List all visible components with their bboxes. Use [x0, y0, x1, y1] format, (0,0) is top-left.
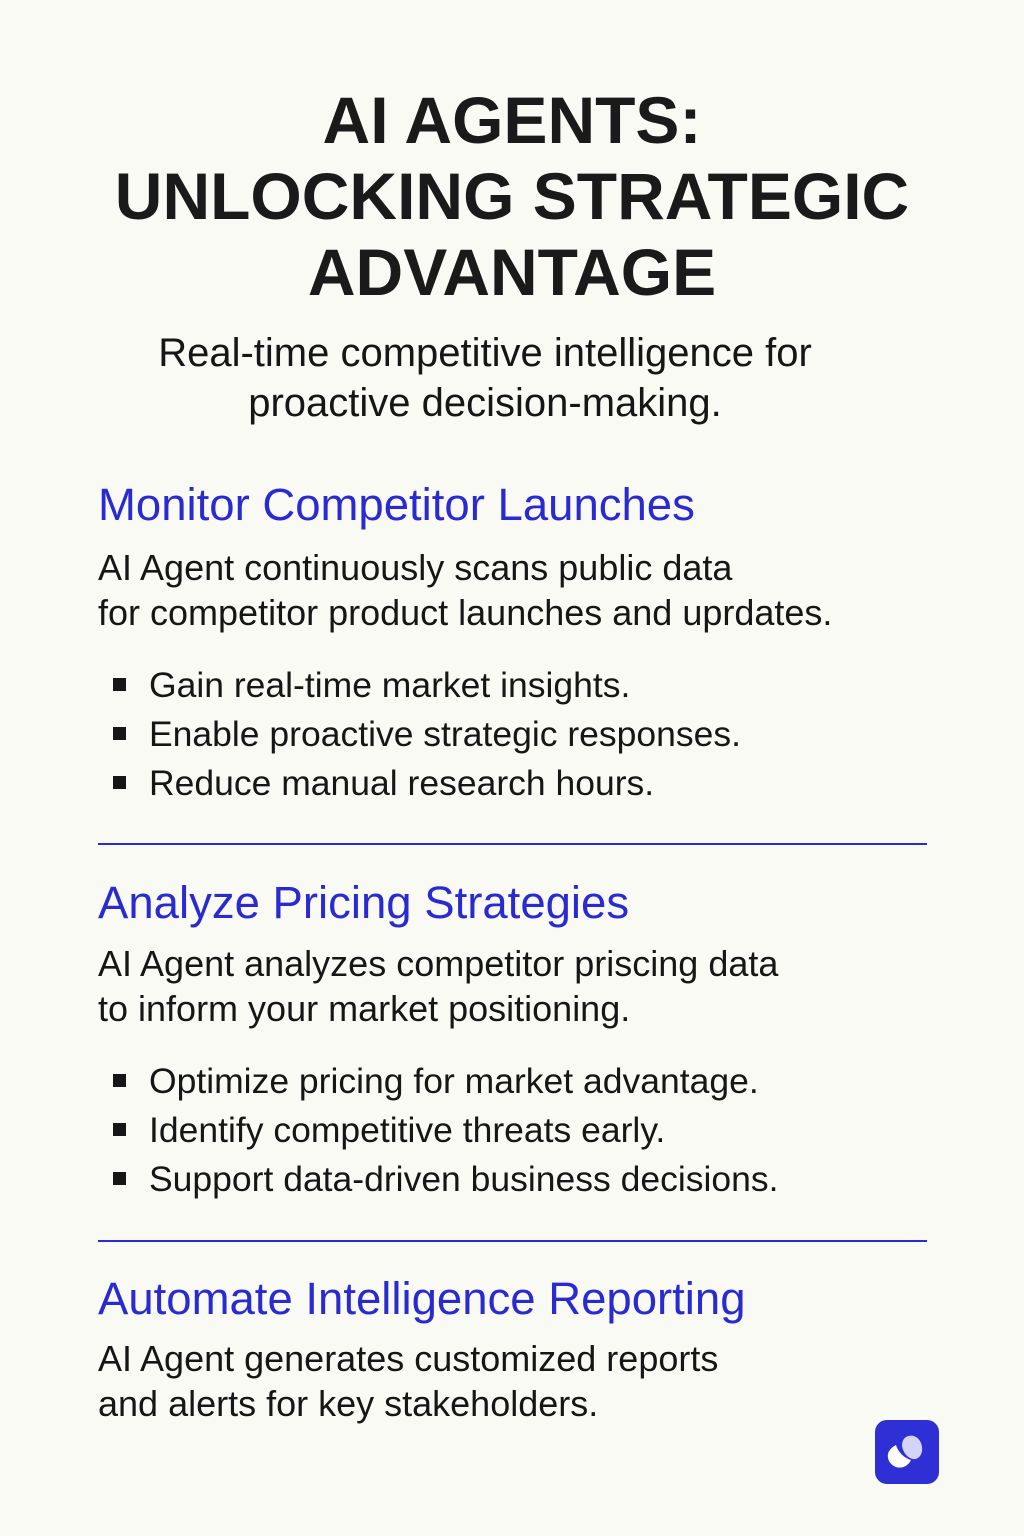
list: monitor benefits: Enable proactive strategic responses. — [149, 714, 741, 754]
title: ADVANTAGE — [308, 235, 716, 309]
text: reporting description: and alerts for key stakeholders. — [98, 1383, 598, 1424]
title — [115, 83, 909, 309]
list: pricing benefits — [113, 1061, 779, 1199]
text: reporting description — [98, 1338, 718, 1424]
subtitle — [158, 331, 812, 425]
text: pricing description: to inform your market positioning. — [98, 988, 630, 1029]
list: monitor benefits: Gain real-time market insights. — [149, 665, 630, 705]
subtitle: proactive decision-making. — [248, 381, 722, 425]
subtitle: Real-time competitive intelligence for — [158, 331, 812, 375]
title: AI AGENTS: — [323, 83, 701, 157]
list: pricing benefits: Identify competitive threats early. — [149, 1110, 665, 1150]
list: monitor benefits: Reduce manual research hours. — [149, 763, 654, 803]
text: monitor description: for competitor product launches and uprdates. — [98, 592, 832, 633]
heading: monitor: Monitor Competitor Launches — [98, 479, 695, 530]
list: monitor benefits — [113, 665, 741, 803]
text: monitor description — [98, 547, 832, 633]
list: pricing benefits: Optimize pricing for market advantage. — [149, 1061, 759, 1101]
title: UNLOCKING STRATEGIC — [115, 159, 909, 233]
heading: reporting: Automate Intelligence Reporting — [98, 1273, 746, 1324]
text: pricing description: AI Agent analyzes competitor priscing data — [98, 943, 778, 984]
text: pricing description — [98, 943, 778, 1029]
heading: pricing: Analyze Pricing Strategies — [98, 877, 629, 928]
text: monitor description: AI Agent continuously scans public data — [98, 547, 732, 588]
list: pricing benefits: Support data-driven business decisions. — [149, 1159, 779, 1199]
text: reporting description: AI Agent generates customized reports — [98, 1338, 718, 1379]
icon: app logo — [875, 1420, 939, 1484]
